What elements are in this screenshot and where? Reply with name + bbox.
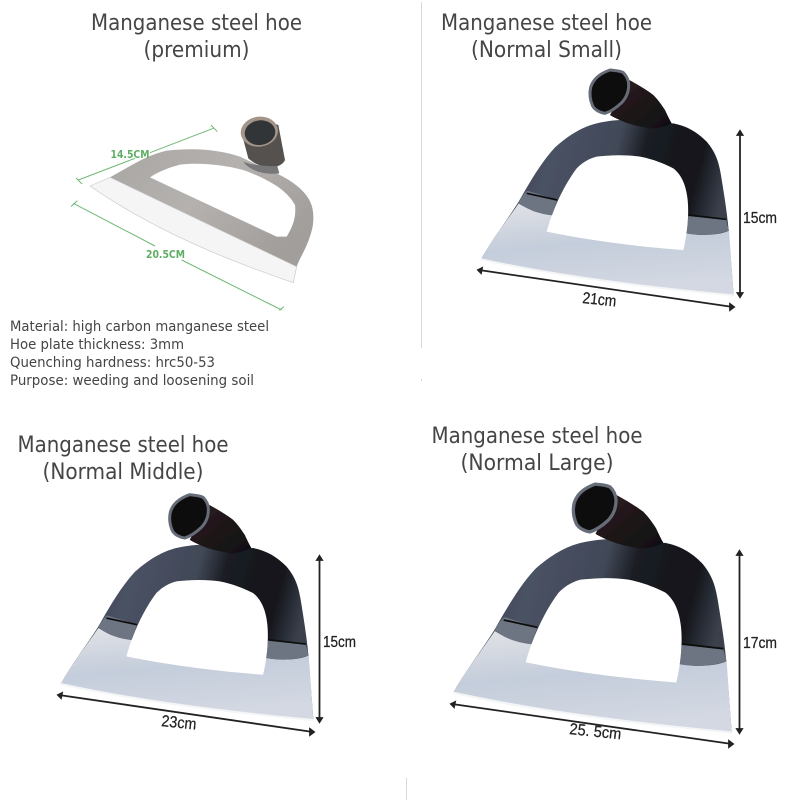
dimension: 15cm height — [317, 556, 356, 722]
title: normal large hoe: Manganese steel hoe — [432, 424, 642, 449]
specifications text: Material: high carbon manganese steel — [10, 319, 269, 335]
subtitle: normal middle: (Normal Middle) — [42, 460, 204, 485]
dimension: 15cm height: 15cm — [743, 210, 777, 227]
product photo: normal middle hoe — [61, 495, 313, 720]
specifications text: Hoe plate thickness: 3mm — [10, 337, 184, 353]
socket tube — [239, 114, 285, 174]
title: normal small hoe: Manganese steel hoe — [441, 11, 652, 36]
dimension: 14.5CM: 14.5CM — [110, 148, 149, 161]
dimension: 20.5CM — [71, 201, 284, 310]
dimension: 20.5CM: 20.5CM — [146, 248, 185, 261]
specifications text — [10, 319, 269, 389]
dimension: 15cm height — [738, 131, 777, 297]
dimension: 21cm width: 21cm — [582, 290, 617, 311]
dimension: 15cm height: 15cm — [323, 634, 356, 651]
title: premium hoe: Manganese steel hoe — [91, 11, 302, 36]
dimension: 25.5cm width — [451, 702, 733, 747]
product photo: normal large hoe — [453, 484, 732, 732]
product photo: normal small hoe — [481, 70, 734, 295]
dimension: 14.5CM — [76, 125, 217, 184]
hoe steel body — [110, 149, 313, 267]
dimension: 21cm width — [478, 268, 734, 311]
divider — [406, 2, 422, 800]
specifications text: Purpose: weeding and loosening soil — [10, 373, 254, 389]
dimension: 23cm width — [58, 693, 314, 735]
subtitle: normal small: (Normal Small) — [471, 38, 622, 63]
product photo: premium hoe — [71, 114, 313, 310]
subtitle: premium: (premium) — [144, 38, 250, 63]
dimension: 23cm width: 23cm — [161, 713, 197, 734]
dimension: 17cm height: 17cm — [743, 635, 777, 652]
specifications text: Quenching hardness: hrc50-53 — [10, 355, 215, 371]
hoe blade edge — [90, 177, 297, 283]
dimension: 25.5cm width: 25. 5cm — [569, 721, 622, 743]
title: normal middle hoe: Manganese steel hoe — [18, 433, 228, 458]
subtitle: normal large: (Normal Large) — [460, 451, 614, 476]
dimension: 17cm height — [737, 551, 777, 733]
